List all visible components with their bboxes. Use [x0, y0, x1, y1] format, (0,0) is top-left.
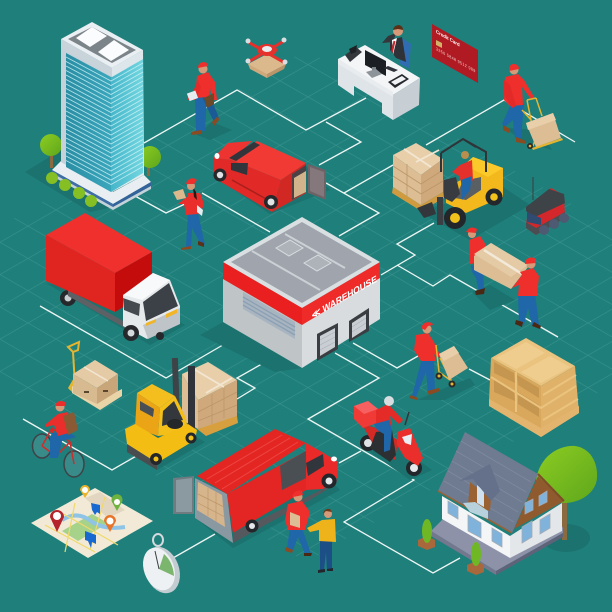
delivery robot	[526, 177, 569, 235]
customer in yellow shirt	[307, 509, 336, 573]
courier with shoulder bag	[187, 62, 232, 140]
house windows	[448, 491, 550, 547]
delivery van small red	[212, 141, 330, 214]
forklift with pallet large	[392, 139, 530, 240]
two couriers carrying a big box	[466, 228, 541, 329]
large red delivery van	[173, 429, 340, 548]
potted plant left	[418, 519, 435, 550]
credit card: 3356 5848 9512 989	[436, 46, 476, 74]
red fascia: ≪ WAREHOUSE	[311, 274, 377, 322]
credit card: Credit Card	[436, 29, 460, 49]
delivery drone	[246, 38, 288, 78]
palletised boxes	[182, 362, 238, 436]
map pins	[50, 485, 122, 548]
city map with pins	[31, 485, 153, 558]
credit card	[432, 24, 478, 83]
porter with hand truck	[409, 322, 475, 400]
wooden crates on pallet	[489, 338, 579, 437]
office desk with manager	[338, 25, 420, 120]
tree behind house	[536, 446, 597, 540]
tree right of tower	[139, 146, 161, 176]
dormer	[459, 464, 500, 519]
tree left of tower	[40, 134, 62, 168]
pallet jack with boxes	[68, 342, 122, 410]
manager	[382, 25, 411, 68]
small forklift with pallet	[125, 358, 238, 470]
warehouse	[200, 217, 380, 372]
courier with hand truck upper right	[502, 64, 563, 150]
courier handing parcel	[285, 491, 312, 556]
red fascia	[223, 262, 380, 325]
scooter courier	[354, 396, 432, 480]
office tower	[25, 22, 161, 212]
stacked boxes on forks	[392, 143, 444, 211]
bushes	[46, 172, 97, 207]
courier woman with parcel	[173, 178, 205, 250]
delivery truck	[46, 213, 185, 345]
potted plant right	[467, 542, 484, 575]
stopwatch	[137, 534, 186, 598]
connector lines	[23, 90, 575, 573]
house with tree	[418, 432, 597, 575]
bicycle courier	[32, 401, 84, 477]
forklift driver	[452, 151, 473, 200]
